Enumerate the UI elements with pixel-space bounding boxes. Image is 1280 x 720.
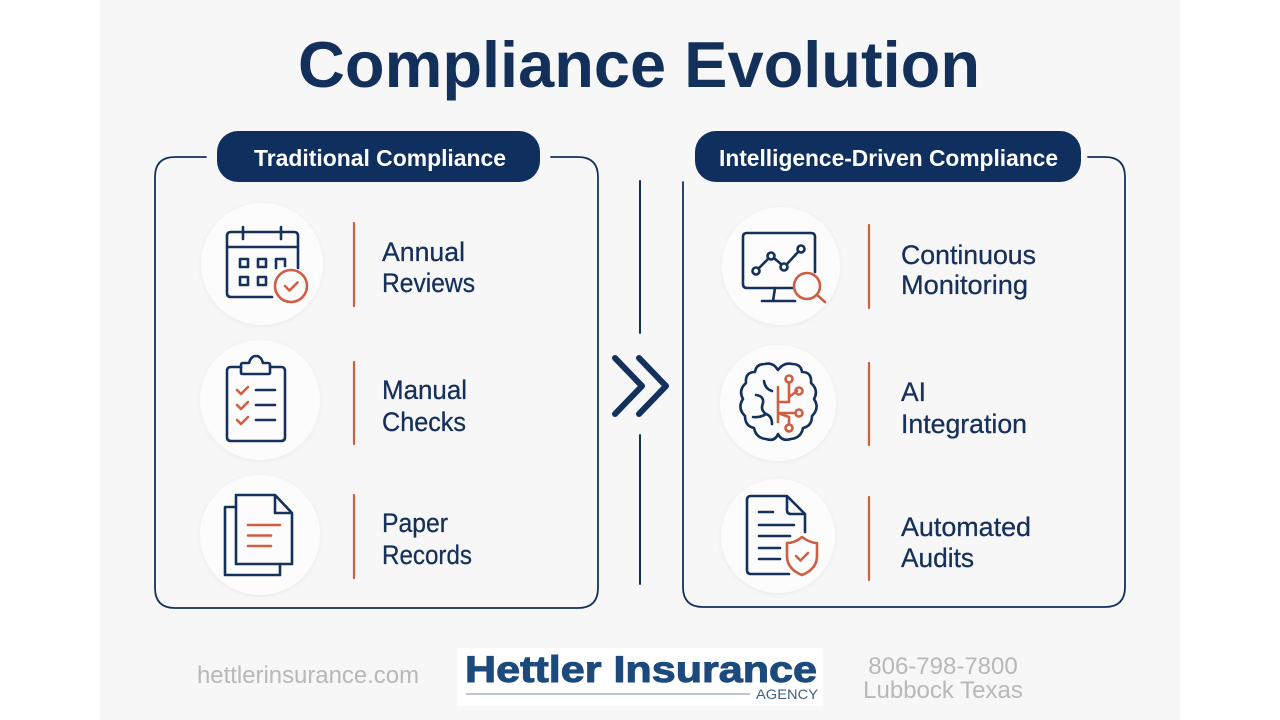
label: annual reviews: Reviews (382, 268, 475, 298)
label: automated audits: Automated (901, 512, 1031, 542)
heading: traditional compliance (217, 131, 540, 182)
footer: contact details (863, 653, 1023, 704)
footer: contact details: 806-798-7800 (868, 653, 1018, 680)
label: annual reviews: Annual (382, 237, 465, 267)
icon: clipboard checklist (227, 356, 285, 441)
title: Compliance Evolution (298, 28, 980, 101)
label: continuous monitoring: Monitoring (901, 270, 1028, 300)
footer: contact details: Lubbock Texas (863, 677, 1023, 704)
footer: logo: AGENCY (756, 686, 819, 702)
label: automated audits: Audits (901, 543, 974, 573)
panel: intelligence-driven compliance (683, 131, 1125, 607)
label: paper records: Paper (382, 508, 448, 538)
item: manual checks (200, 340, 467, 460)
label: continuous monitoring (901, 240, 1036, 300)
label: ai integration: Integration (901, 409, 1027, 439)
heading: intelligence-driven compliance: Intelligence-Driven Compliance (719, 145, 1058, 171)
label: ai integration: AI (901, 377, 926, 407)
item: automated audits (721, 479, 1031, 593)
item: ai integration (720, 345, 1027, 461)
icon: document with shield (747, 496, 817, 575)
label: manual checks: Checks (382, 407, 466, 437)
icon: brain with circuit (740, 364, 817, 440)
icon: monitor with magnifier (743, 233, 825, 302)
label: continuous monitoring: Continuous (901, 240, 1036, 270)
footer: logo: Hettler Insurance (465, 649, 817, 690)
panel: traditional compliance (155, 131, 598, 608)
item: continuous monitoring (722, 207, 1036, 325)
heading: intelligence-driven compliance (695, 131, 1081, 182)
center divider with arrow (615, 181, 666, 584)
label: ai integration (901, 377, 1027, 439)
footer: logo (457, 648, 823, 706)
label: annual reviews (382, 237, 475, 298)
label: paper records (382, 508, 472, 570)
label: manual checks (382, 375, 467, 437)
label: automated audits (901, 512, 1031, 573)
label: paper records: Records (382, 540, 472, 570)
footer: website: hettlerinsurance.com (197, 662, 419, 689)
item: paper records (200, 475, 472, 595)
label: manual checks: Manual (382, 375, 467, 405)
heading: traditional compliance: Traditional Compliance (254, 145, 506, 171)
arrow: double chevron (615, 358, 666, 414)
item: annual reviews (201, 203, 475, 325)
icon: stacked documents (225, 495, 292, 575)
icon: calendar with check (227, 227, 307, 302)
